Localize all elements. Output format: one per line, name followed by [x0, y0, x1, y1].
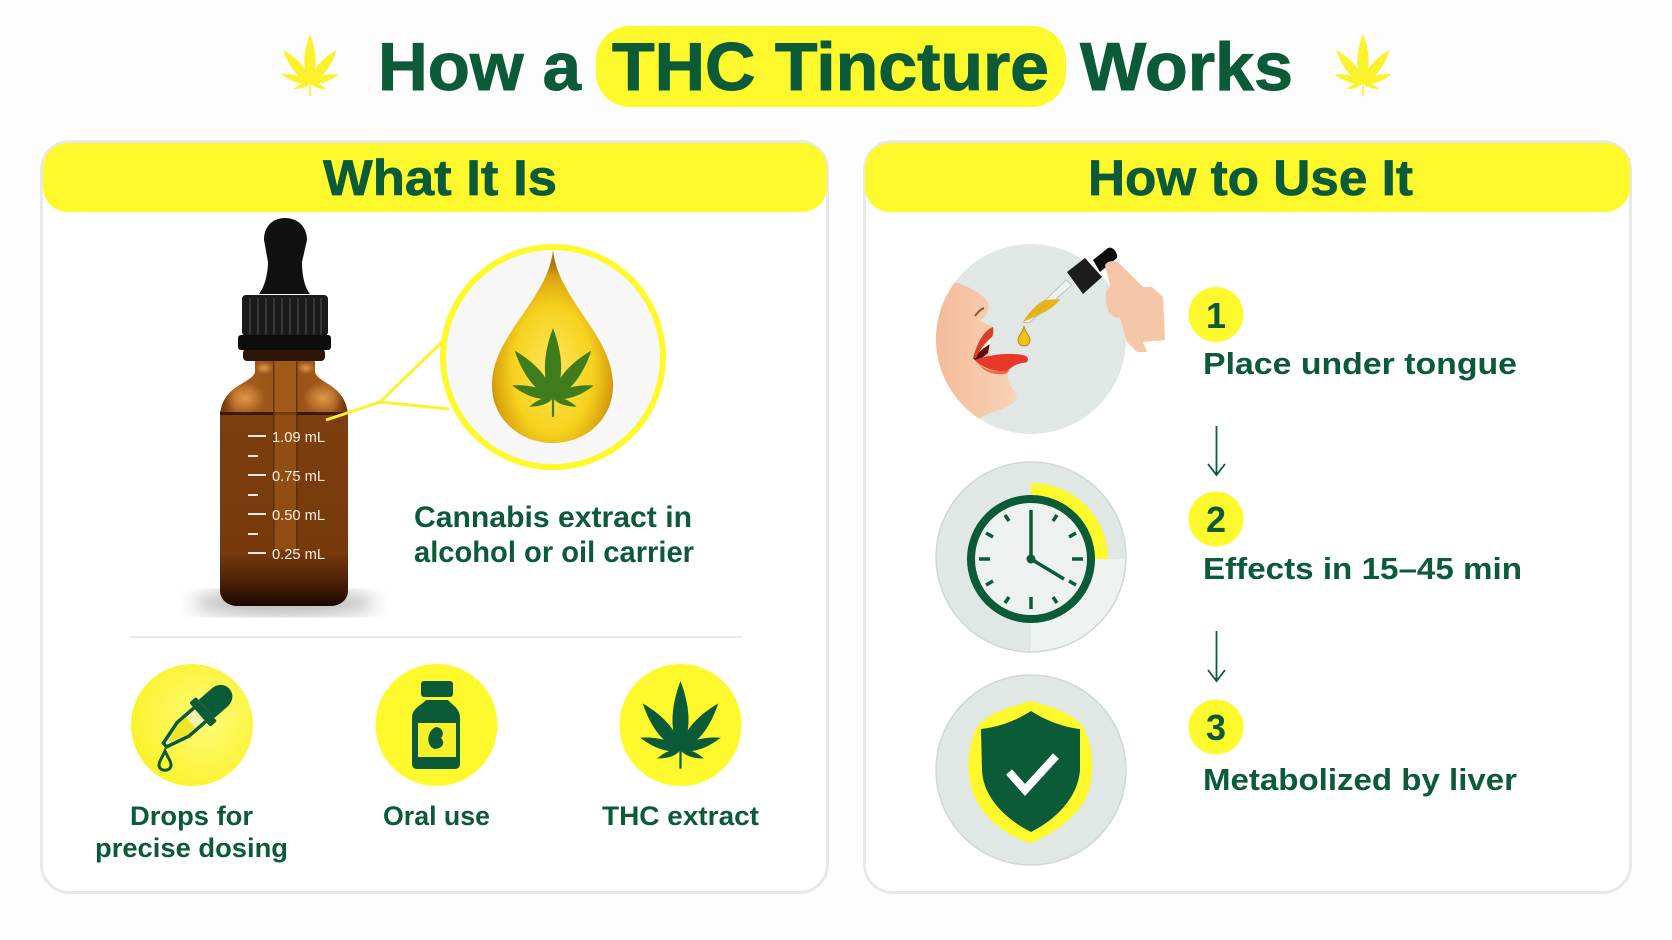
graduation label: 0.50 mL	[272, 507, 325, 524]
panel: how to use it	[864, 142, 1630, 892]
clock ticks	[979, 510, 1083, 609]
dropper	[1023, 248, 1117, 323]
title	[279, 26, 1394, 107]
callout circle with oil drop	[443, 247, 663, 467]
check mark	[1009, 756, 1056, 790]
panel heading: What It Is	[323, 150, 557, 206]
step 3 text: Metabolized by liver	[1203, 762, 1517, 797]
callout lines	[326, 342, 449, 420]
label: Drops for	[130, 801, 253, 831]
step 3 illustration	[936, 675, 1126, 865]
description text: Cannabis extract in	[414, 501, 692, 534]
title highlight pill	[596, 26, 1066, 107]
graduation label: 1.09 mL	[272, 429, 325, 446]
circle background	[936, 244, 1126, 434]
icon: left yellow leaf	[279, 34, 341, 96]
lighter lower-right sector	[1031, 559, 1125, 651]
shoulder highlights	[225, 382, 265, 414]
step 1 badge	[1188, 287, 1244, 342]
step 1 text: Place under tongue	[1203, 346, 1517, 381]
step 2 illustration	[936, 462, 1126, 652]
feature: oral use	[376, 664, 498, 831]
step 2 badge	[1188, 492, 1244, 546]
step 3 badge	[1188, 700, 1244, 754]
panel frame	[42, 142, 828, 892]
oil droplet	[1018, 326, 1030, 346]
label: precise dosing	[95, 833, 288, 863]
step 1 illustration	[936, 244, 1165, 434]
leaf in drop	[509, 328, 597, 417]
arrow	[1208, 426, 1225, 475]
panel heading: How to Use It	[1088, 150, 1413, 206]
yellow time arc	[1031, 483, 1108, 559]
circle background	[936, 462, 1126, 652]
title text: Works: Works	[1080, 29, 1293, 105]
description text: alcohol or oil carrier	[414, 536, 694, 569]
bottle liquid	[220, 415, 348, 606]
bottle	[192, 218, 376, 615]
title text: THC Tincture: THC Tincture	[612, 29, 1049, 105]
icon: leaf	[620, 664, 742, 786]
face	[936, 282, 1028, 418]
panel header bar	[43, 143, 827, 212]
arrow	[1208, 631, 1225, 681]
green shield	[981, 711, 1080, 832]
step 1 badge: 1	[1206, 295, 1226, 336]
feature: drops	[95, 664, 288, 863]
feature: THC extract	[602, 664, 759, 831]
title text: How a: How a	[378, 29, 582, 105]
cap collar	[238, 335, 331, 350]
graduation label: 0.25 mL	[272, 546, 325, 563]
description text	[414, 501, 694, 569]
panel frame	[864, 142, 1630, 892]
step 2 badge: 2	[1206, 499, 1226, 540]
panel header bar	[865, 143, 1630, 212]
panel: what it is	[42, 142, 828, 892]
hand	[1105, 261, 1165, 352]
icon: right yellow leaf	[1332, 34, 1394, 96]
bottle shadow	[192, 591, 376, 615]
bottle neck ring	[243, 349, 325, 361]
label: THC extract	[602, 801, 759, 831]
icon: bottle	[376, 664, 498, 786]
circle background	[936, 675, 1126, 865]
icon: dropper	[131, 664, 253, 786]
oil drop	[492, 250, 613, 443]
bottle glass body	[220, 360, 348, 606]
callout circle	[443, 247, 663, 467]
ribbed cap	[242, 295, 328, 336]
yellow shield backing	[969, 701, 1092, 843]
graduation label: 0.75 mL	[272, 468, 325, 485]
step 3 badge: 3	[1206, 707, 1226, 748]
graduation ticks	[248, 436, 266, 553]
step 2 text: Effects in 15–45 min	[1203, 551, 1522, 586]
label: Oral use	[383, 801, 490, 831]
clock hands	[1031, 522, 1064, 579]
clock face	[971, 499, 1091, 619]
dropper bulb	[259, 218, 310, 294]
dropper pipette in bottle	[273, 360, 297, 550]
